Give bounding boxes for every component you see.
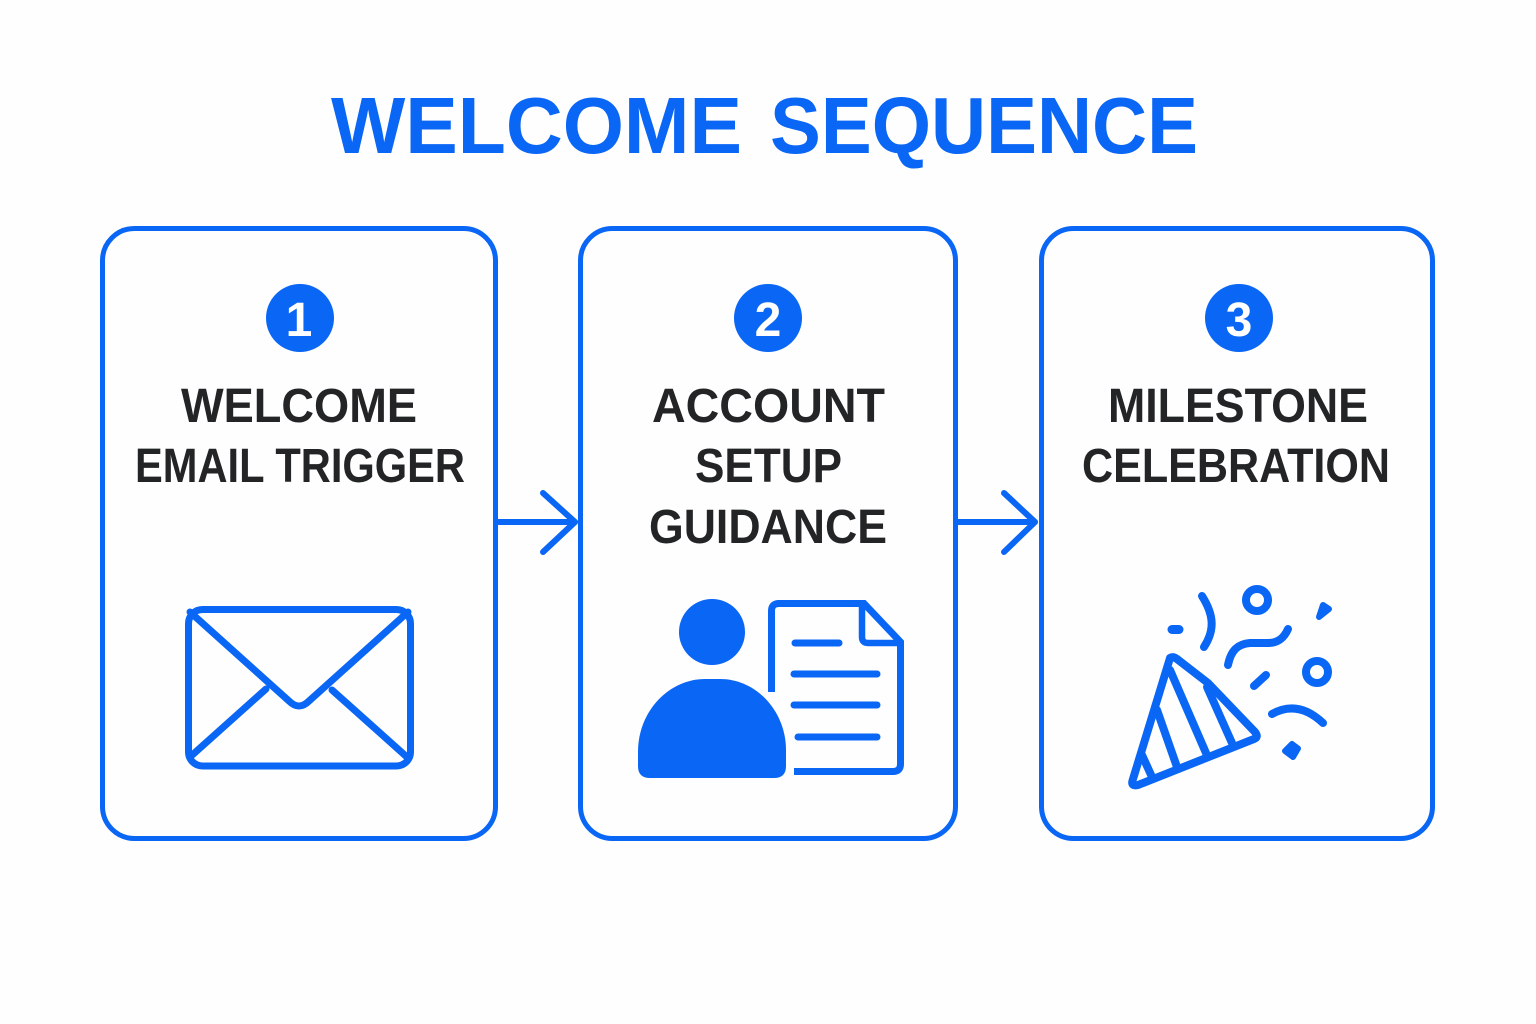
panel: step 2 account setup guidance (580, 228, 956, 838)
panel: step 1 welcome email trigger (102, 228, 496, 838)
step number 2: 2 (755, 294, 781, 347)
heading: milestone celebration: MILESTONE (1108, 380, 1368, 433)
icon: party popper (1132, 589, 1329, 785)
title (331, 81, 1198, 170)
arrow: step 2 to step 3 (958, 493, 1035, 552)
title: SEQUENCE (770, 81, 1198, 170)
step number 3 (1205, 284, 1273, 352)
heading: welcome email trigger (135, 380, 465, 493)
step number 2 (734, 284, 802, 352)
heading: welcome email trigger: WELCOME (181, 380, 417, 433)
step number 1 (266, 284, 334, 352)
heading: milestone celebration: CELEBRATION (1082, 440, 1390, 493)
title: WELCOME (331, 81, 742, 170)
heading: milestone celebration (1082, 380, 1390, 493)
heading: account setup guidance: ACCOUNT (652, 380, 885, 433)
step number 1: 1 (286, 294, 312, 347)
icon: person with document (638, 599, 900, 778)
step number 3: 3 (1226, 294, 1252, 347)
heading: welcome email trigger: EMAIL TRIGGER (135, 440, 465, 493)
arrow: step 1 to step 2 (498, 493, 575, 552)
panel: step 3 milestone celebration (1042, 228, 1432, 838)
icon: envelope (188, 610, 410, 766)
heading: account setup guidance: GUIDANCE (649, 501, 887, 554)
heading: account setup guidance: SETUP (695, 440, 842, 493)
heading: account setup guidance (649, 380, 887, 554)
